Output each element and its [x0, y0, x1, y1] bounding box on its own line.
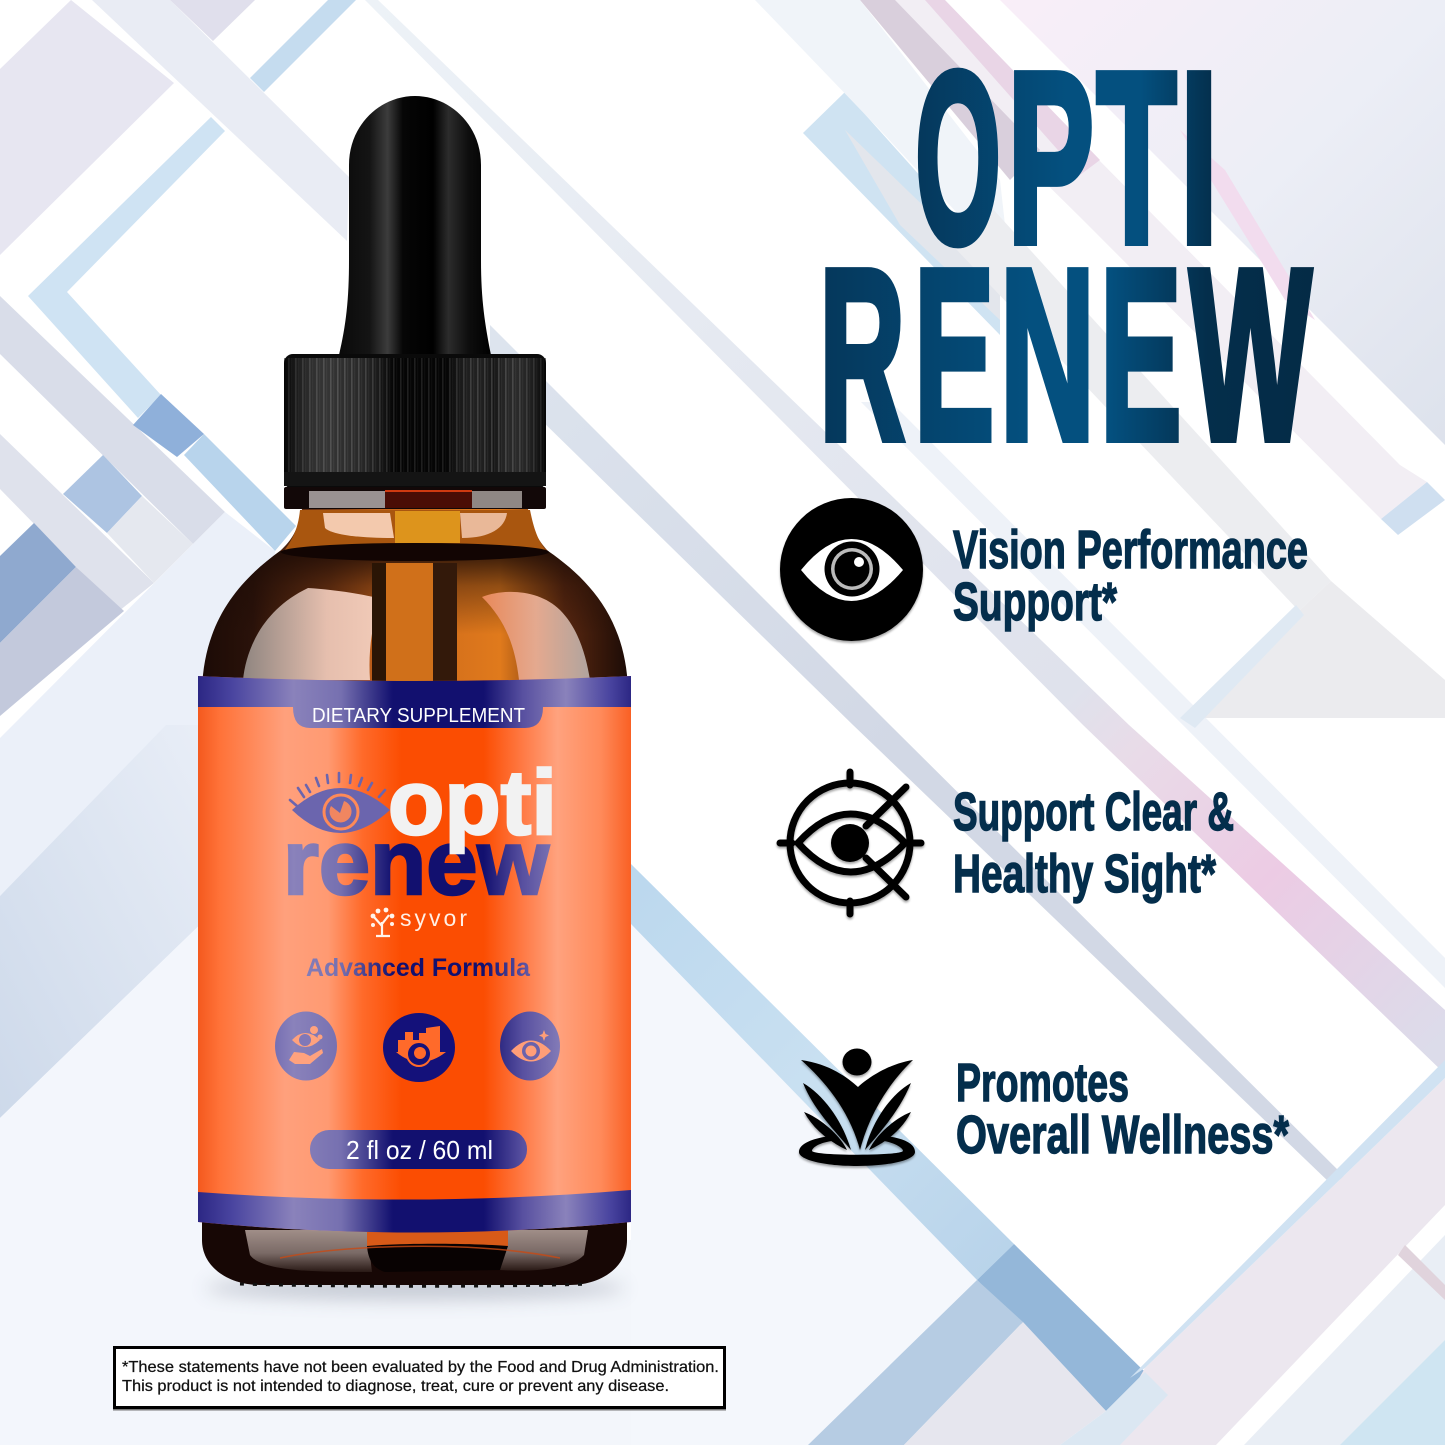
title: RENEW: E — [1100, 218, 1182, 491]
brand mark: syvor — [371, 905, 467, 936]
bottom purple band — [198, 1190, 631, 1232]
feature text: support clear and healthy sight: Support Clear & — [953, 782, 1234, 842]
feature text: promotes overall wellness: Overall Wellness* — [956, 1105, 1289, 1165]
disclaimer box: This product is not intended to diagnose, treat, cure or prevent any disease. — [122, 1378, 669, 1395]
feature text: support clear and healthy sight: Healthy Sight* — [953, 844, 1216, 904]
title: RENEW: W — [1190, 218, 1312, 491]
volume pill — [310, 1130, 527, 1169]
feature text: promotes overall wellness — [956, 1053, 1289, 1165]
volume pill: 2 fl oz / 60 ml — [346, 1135, 493, 1165]
icon: wellness figure — [799, 1048, 915, 1166]
lower glass base — [202, 1210, 627, 1286]
title: OPTI: O — [915, 21, 1001, 294]
label icon: eye with chart — [383, 1013, 455, 1082]
title: RENEW: N — [1000, 218, 1095, 491]
label icon: eye with sparkle — [500, 1012, 560, 1080]
logo word: opti: opti — [388, 752, 557, 854]
feature text: support clear and healthy sight — [953, 782, 1234, 904]
disclaimer box — [113, 1348, 726, 1410]
amber glass shoulders and neck — [202, 509, 628, 690]
icon: eye in black circle — [780, 498, 923, 641]
disclaimer box: *These statements have not been evaluated by the Food and Drug Administration. — [122, 1359, 719, 1376]
title: OPTI: P — [1008, 21, 1094, 294]
title: OPTI: T — [1096, 21, 1177, 294]
feature text: promotes overall wellness: Promotes — [956, 1053, 1129, 1113]
icon: crosshair eye — [780, 772, 921, 914]
title: OPTI: I — [1180, 21, 1218, 294]
product bottle — [198, 96, 631, 1300]
logo word: renew: renew — [283, 812, 549, 914]
logo eye — [290, 773, 390, 833]
title: RENEW: R — [819, 218, 905, 491]
advanced formula text: Advanced Formula — [306, 954, 531, 982]
dropper bulb — [339, 96, 491, 355]
orange label — [198, 676, 631, 1232]
dietary supplement text: DIETARY SUPPLEMENT — [312, 705, 525, 727]
top purple band — [198, 676, 631, 728]
title: RENEW: E — [914, 218, 994, 491]
feature text: vision performance support: Vision Performance — [953, 520, 1308, 580]
feature text: vision performance support — [953, 520, 1308, 632]
bottle ground shadow — [205, 1276, 625, 1300]
feature text: vision performance support: Support* — [953, 572, 1117, 632]
collar neck ring — [284, 487, 546, 509]
ribbed dropper collar — [284, 354, 546, 489]
brand mark: syvor: syvor — [400, 905, 467, 931]
label icon: eye in hand — [275, 1012, 337, 1080]
